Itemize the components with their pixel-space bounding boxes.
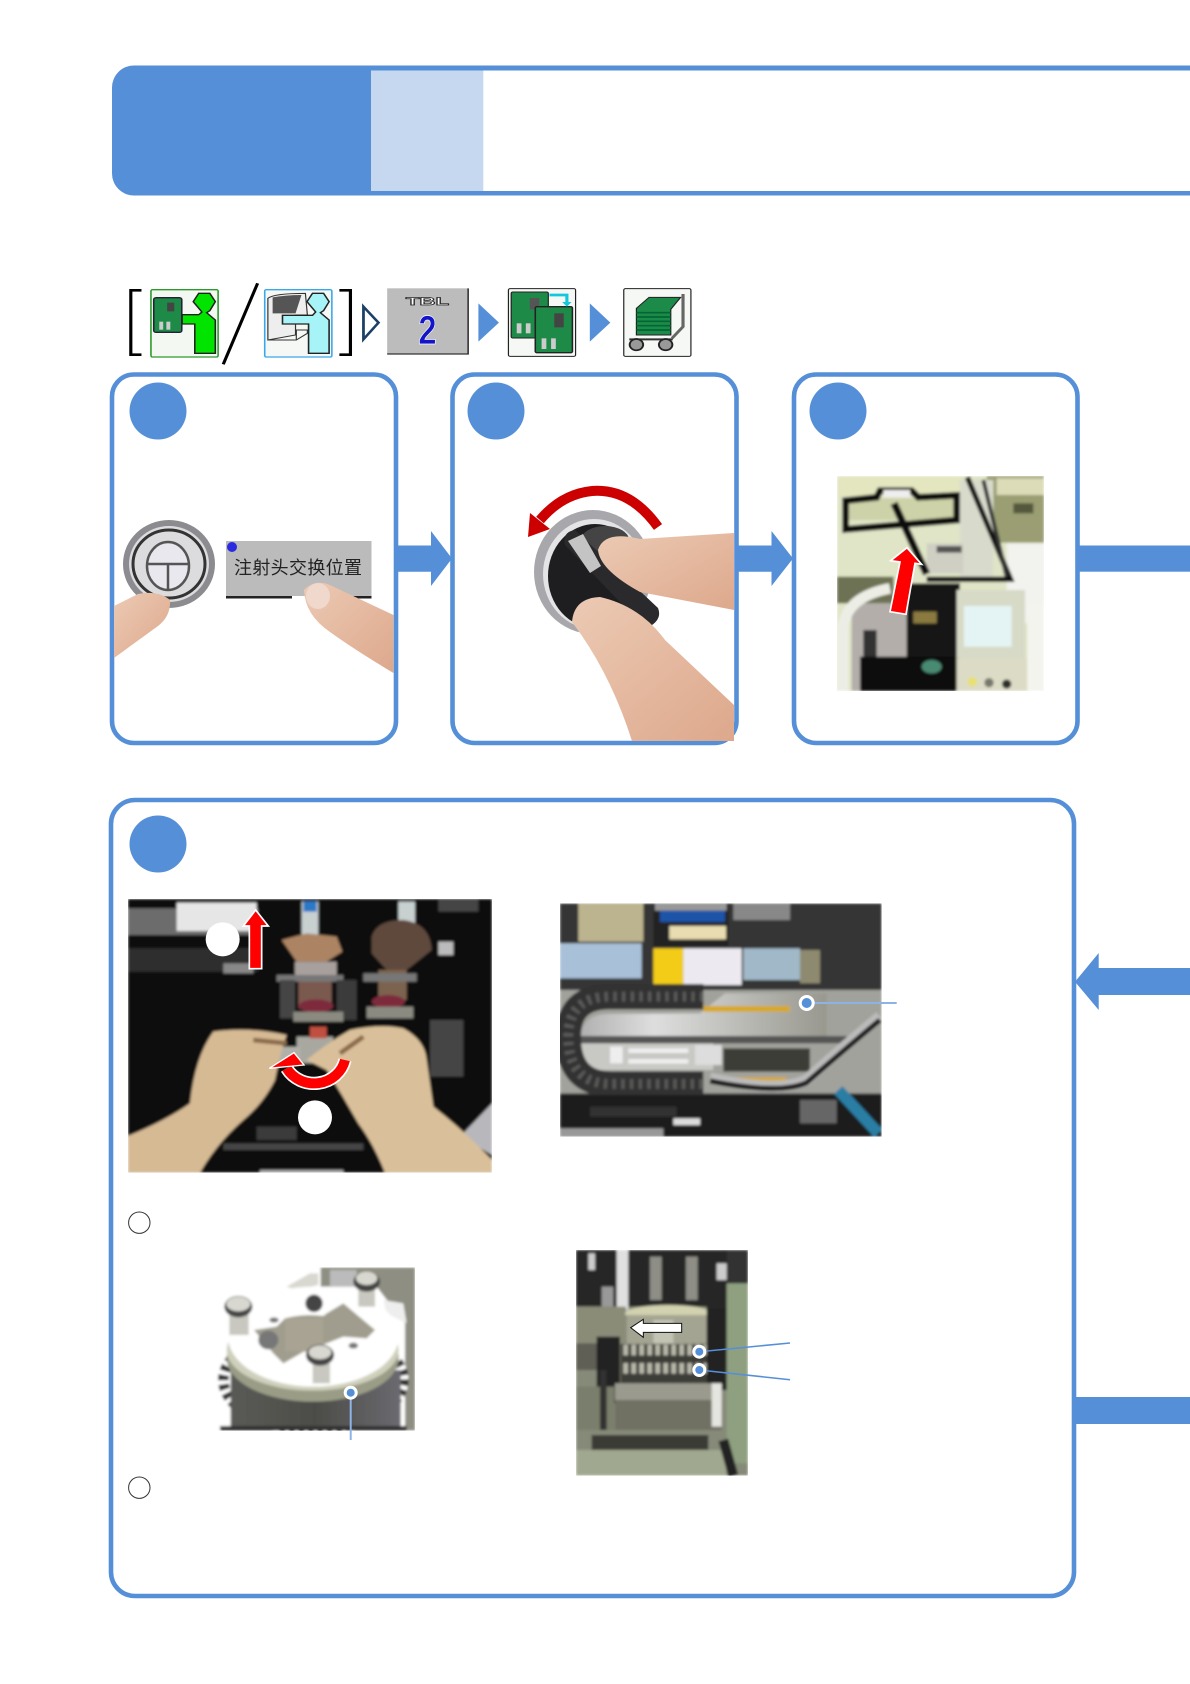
arrow: red up	[243, 910, 268, 969]
step number badge 4	[130, 816, 186, 872]
icon: machine operator	[265, 290, 332, 357]
marker: note a	[129, 1212, 150, 1233]
icon: dial switch	[123, 520, 215, 608]
button: head change position	[226, 541, 372, 598]
icon toolbar: operation sequence	[131, 283, 691, 364]
marker b	[298, 1100, 332, 1134]
icon: rotary selector with fingers	[534, 510, 734, 741]
slash	[223, 283, 258, 364]
arrow: solid triangle 1	[478, 303, 499, 342]
diagram: 3D head base	[215, 1267, 415, 1437]
step number badge 2	[468, 382, 524, 440]
icon: board rack cart	[624, 289, 691, 356]
icon: TBL 2 button: 2	[418, 308, 437, 353]
icon: TBL 2 button: TBL	[406, 295, 450, 308]
arrow: outlined triangle	[363, 307, 378, 339]
arrow: red up	[890, 548, 922, 614]
callout: lower gear	[694, 1364, 790, 1380]
photo: cable carrier	[560, 903, 882, 1137]
arrow: red counter-clockwise	[528, 491, 658, 537]
arrow: step 2 to step 3	[738, 531, 793, 586]
icon: board switch	[508, 289, 576, 356]
arrow: step 3 connector	[1079, 546, 1190, 572]
left bracket	[131, 290, 141, 355]
marker: note b	[129, 1477, 150, 1498]
panel: step 3	[794, 374, 1078, 743]
header banner	[112, 66, 1190, 196]
step number badge 1	[130, 382, 186, 440]
icon: left finger	[114, 593, 170, 658]
button: head change position: 注射头交换位置	[234, 558, 362, 578]
panel: step 4	[111, 800, 1074, 1596]
callout: cable carrier	[800, 996, 897, 1010]
icon: right finger	[292, 583, 394, 673]
arrow: solid triangle 2	[590, 303, 610, 342]
callout: head base	[345, 1387, 356, 1440]
arrow: white direction	[631, 1319, 682, 1337]
arrow: step 1 to step 2	[397, 531, 452, 586]
callout: upper gear	[694, 1343, 790, 1357]
icon: board operator	[151, 290, 218, 357]
photo: machine cover opened	[837, 476, 1044, 691]
photo: hands removing head	[128, 899, 492, 1173]
photo: gear assembly	[576, 1250, 748, 1476]
arrow: incoming to step 4	[1075, 953, 1190, 1010]
panel: step 1	[112, 374, 396, 743]
step number badge 3	[810, 382, 866, 440]
panel: step 2	[452, 374, 736, 743]
arrow: red curved	[269, 1053, 345, 1083]
marker a	[206, 922, 240, 956]
right bracket	[339, 290, 350, 355]
icon: TBL 2 button	[387, 288, 468, 354]
arrow: step 4 connector	[1076, 1397, 1190, 1424]
